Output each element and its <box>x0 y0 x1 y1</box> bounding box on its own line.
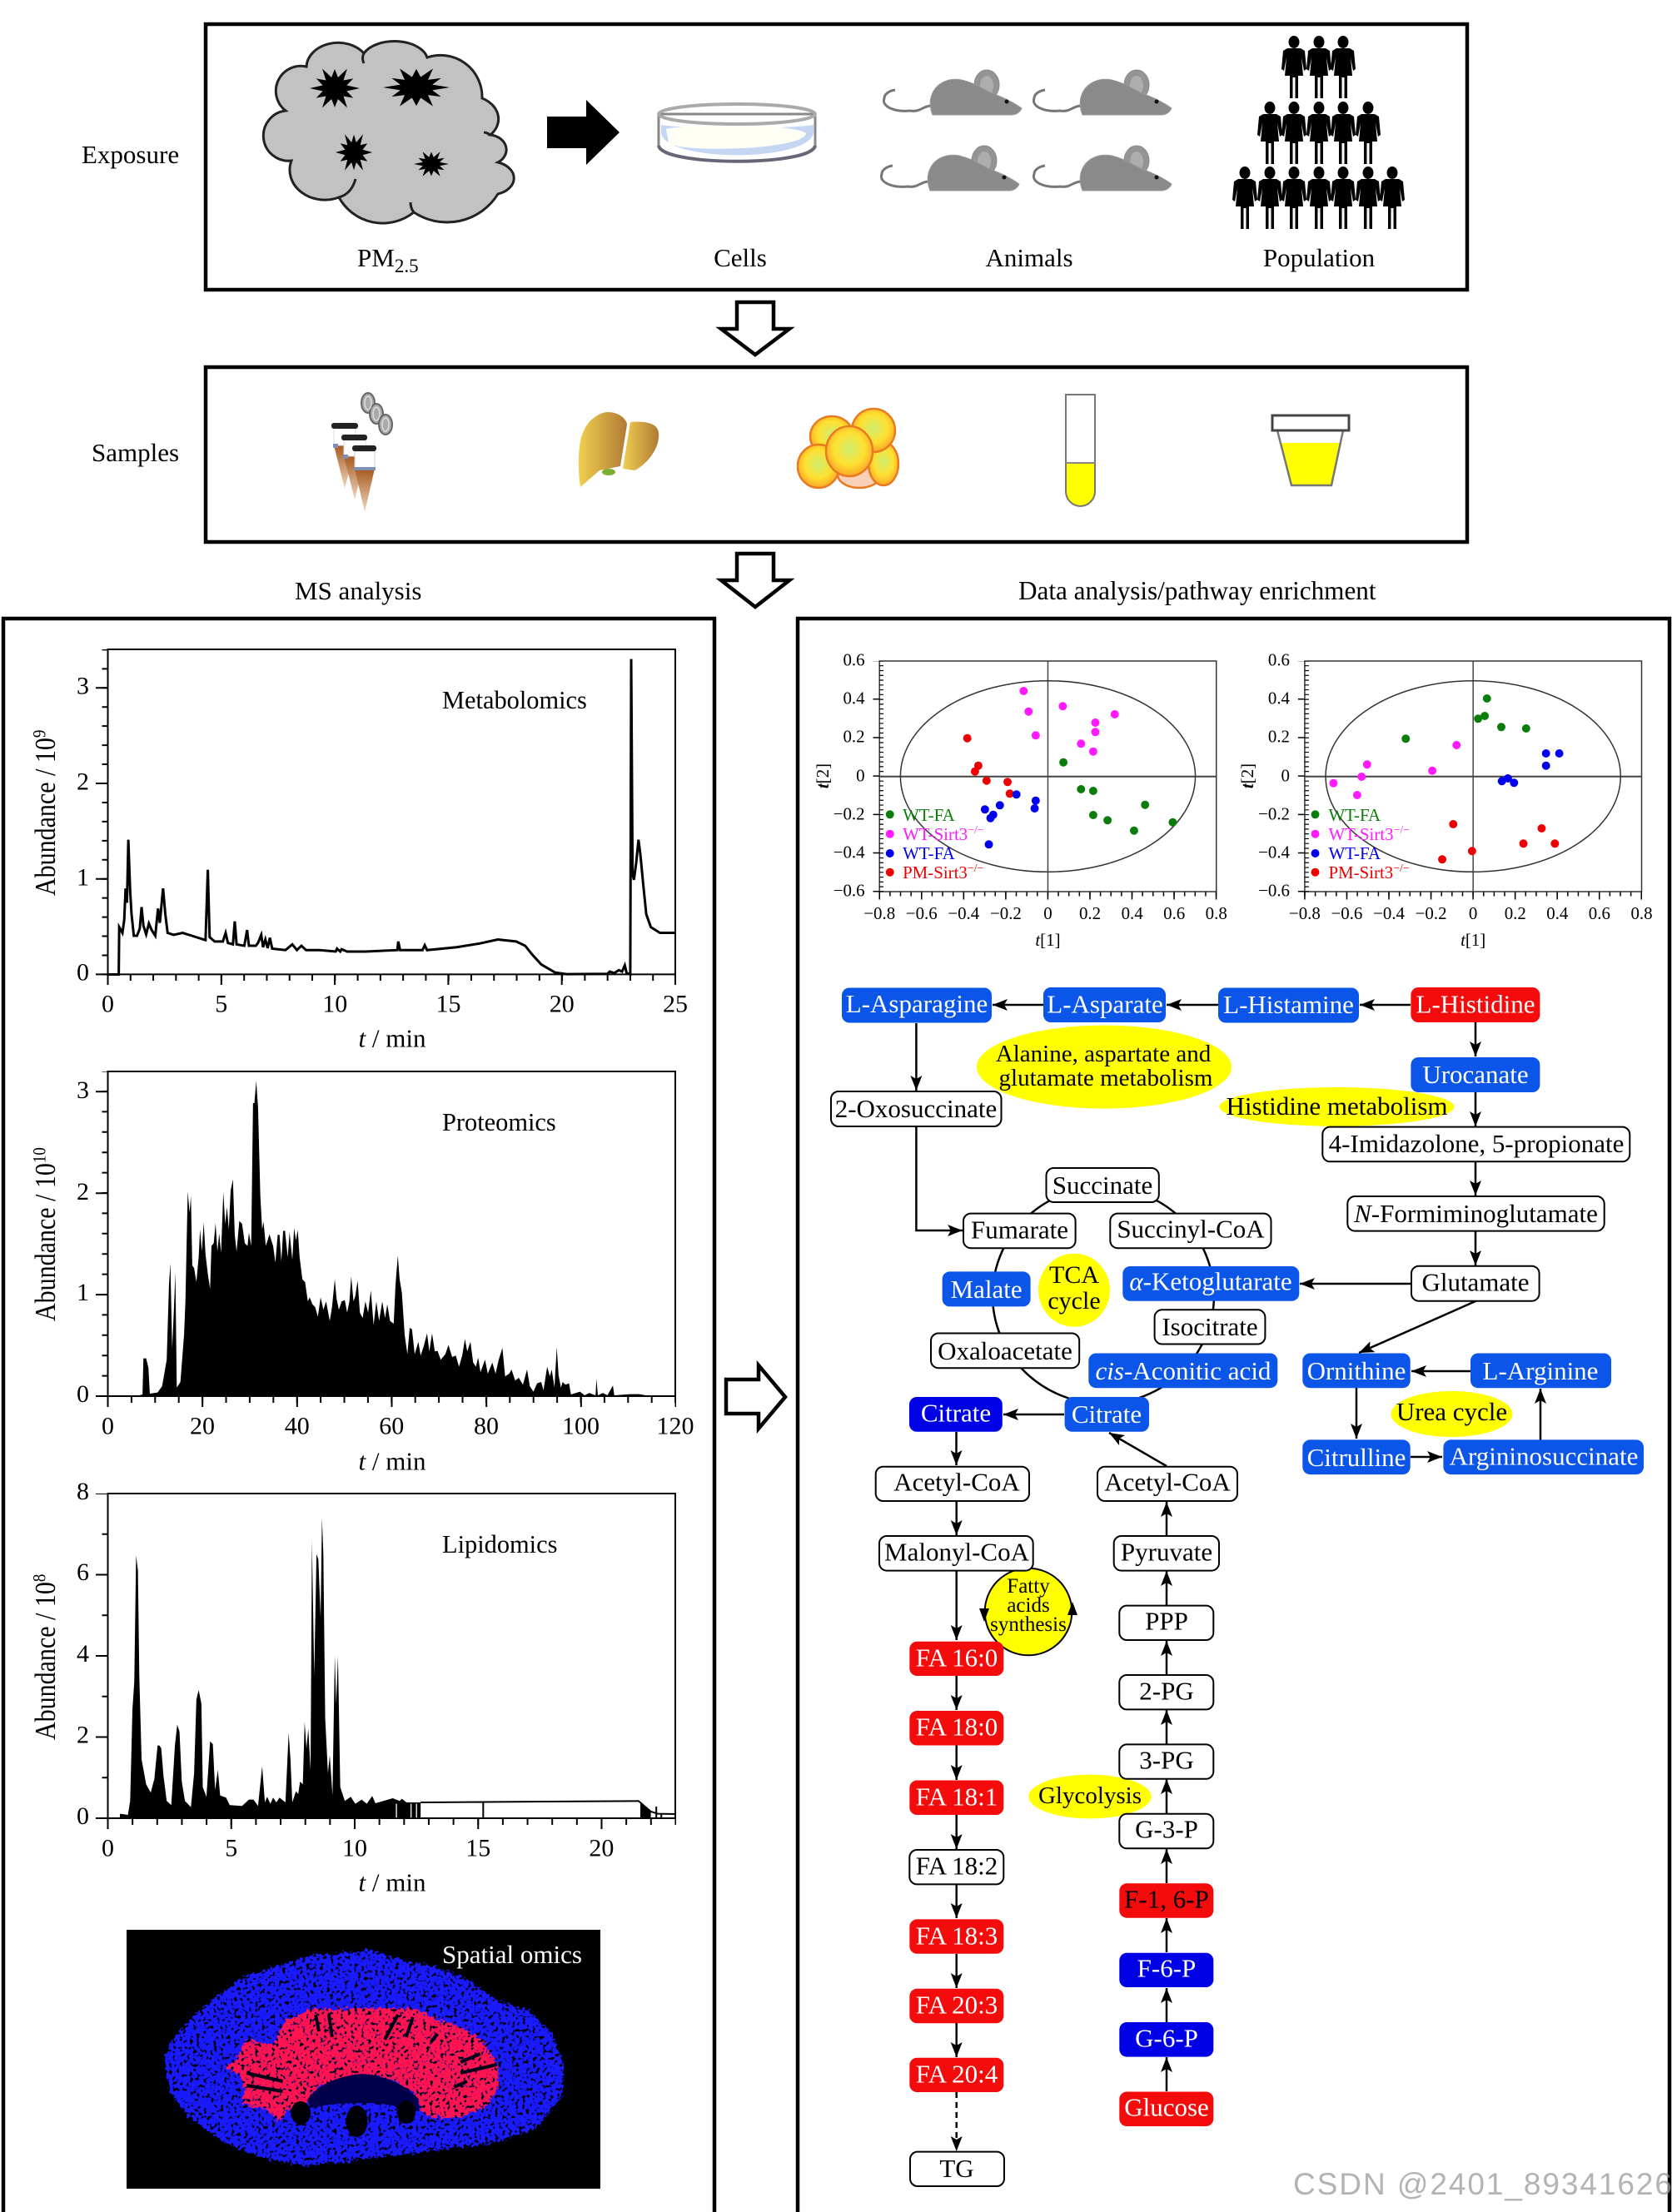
node: Acetyl-CoA left <box>876 1467 1029 1501</box>
label: Population: Population <box>1263 243 1376 272</box>
chart: PCA score plot right: 0.8 <box>1630 903 1653 923</box>
chart: proteomics: 20 <box>190 1412 215 1440</box>
panel: data analysis and pathway enrichment <box>798 619 1670 2212</box>
legend: right PCA: WT-Sirt3 <box>1328 824 1394 844</box>
node: 3-PG <box>1119 1744 1213 1779</box>
label: histidine metabolism: Histidine metabolism <box>1226 1091 1448 1121</box>
label: alanine, aspartate and glutamate metabolism: Alanine, aspartate and <box>996 1041 1212 1067</box>
chart: lipidomics: 0 <box>102 1835 114 1862</box>
chart: PCA score plot right: −0.2 <box>1416 903 1447 923</box>
label: Cells: Cells <box>714 243 767 272</box>
chart: PCA score plot left <box>813 649 1227 950</box>
chart: metabolomics: 2 <box>77 768 89 796</box>
arrows: glycolysis chain <box>1166 1571 1167 2091</box>
label: Proteomics: Proteomics <box>442 1108 556 1136</box>
legend: right PCA: WT-FA <box>1328 805 1381 825</box>
pathway bubble: histidine metabolism <box>1219 1087 1454 1126</box>
legend: left PCA <box>886 805 984 882</box>
chart: PCA score plot right <box>1237 649 1653 950</box>
axis title: abundance: Abundance / 10 <box>29 738 61 896</box>
axis title: abundance: Abundance / 10 <box>29 1582 61 1740</box>
axis title: time: t / min <box>359 1868 426 1896</box>
heading: MS analysis: MS analysis <box>295 576 421 605</box>
chart: proteomics: 0 <box>77 1380 89 1408</box>
node: 2-PG: 2-PG <box>1139 1677 1194 1705</box>
chart: PCA score plot left: 0.4 <box>843 688 865 708</box>
axis title: t[2]: t[2] <box>813 763 833 788</box>
legend: right PCA: PM-Sirt3 <box>1328 862 1393 882</box>
node: L-Asparagine: L-Asparagine <box>846 989 988 1018</box>
node: 3-PG: 3-PG <box>1139 1745 1194 1775</box>
axis title: t[2]: t[2] <box>1237 763 1257 788</box>
arrows: histidine and amino acid routes <box>916 1005 1475 1353</box>
node: cis-Aconitic acid: cis-Aconitic acid <box>1096 1356 1271 1385</box>
axis title: time: t / min <box>359 1024 426 1052</box>
chart: PCA score plot right: 0.2 <box>1505 903 1526 923</box>
chart: PCA score plot left: 0.2 <box>843 726 865 747</box>
icon: PM2.5 cloud <box>263 42 514 223</box>
pathway map <box>831 987 1644 2186</box>
chart: lipidomics: 6 <box>77 1558 89 1586</box>
chart: PCA score plot right: −0.4 <box>1373 903 1406 923</box>
node: PPP <box>1119 1606 1213 1640</box>
arrows: fatty acid chain <box>955 1571 958 2151</box>
chart: PCA score plot right: −0.8 <box>1289 903 1321 923</box>
chart: lipidomics: 4 <box>77 1640 89 1668</box>
label: Metabolomics: Metabolomics <box>442 686 587 714</box>
node: 2-Oxosuccinate: 2-Oxosuccinate <box>835 1094 997 1123</box>
arrow: MS analysis to data analysis <box>726 1365 785 1429</box>
arrows: fatty acid synthesis bubble <box>979 1602 1077 1622</box>
node: L-Histamine: L-Histamine <box>1223 990 1354 1019</box>
axis title: abundance: 10 <box>30 1147 50 1163</box>
node: Malate: Malate <box>951 1275 1023 1304</box>
legend: right PCA: −/− <box>1393 862 1410 875</box>
heading: Data analysis/pathway enrichment: Data analysis/pathway enrichment <box>1018 576 1376 605</box>
node: F-6-P <box>1119 1953 1213 1987</box>
pathway bubble: TCA cycle <box>1038 1254 1110 1327</box>
chart: lipidomics: 20 <box>589 1835 614 1862</box>
node: G-6-P <box>1119 2022 1213 2057</box>
node: FA 18:2: FA 18:2 <box>916 1852 998 1880</box>
chart: proteomics: 120 <box>656 1412 694 1440</box>
node: Succinyl-CoA: Succinyl-CoA <box>1117 1214 1265 1244</box>
label: fatty acids synthesis: acids <box>1007 1594 1050 1617</box>
chart: PCA score plot right: 0.2 <box>1268 726 1290 747</box>
panel: exposure <box>82 24 1467 290</box>
chart: proteomics: 80 <box>474 1412 499 1440</box>
icon: urine cup <box>1272 415 1349 485</box>
icon: petri dish <box>659 104 815 162</box>
label: urea cycle: Urea cycle <box>1396 1397 1507 1426</box>
chart: PCA score plot right: 0 <box>1469 903 1477 923</box>
node: Glutamate: Glutamate <box>1421 1267 1530 1297</box>
axis title: abundance: 9 <box>30 730 50 738</box>
icon: liver <box>579 412 659 487</box>
node: L-Histidine: L-Histidine <box>1416 989 1535 1019</box>
chart: PCA score plot right: −0.6 <box>1258 880 1290 901</box>
label: Animals: Animals <box>985 243 1073 272</box>
chart: PCA score plot left: 0.6 <box>843 649 865 670</box>
chart: PCA score plot right: −0.4 <box>1258 842 1291 862</box>
chart: PCA score plot left: −0.8 <box>863 903 895 923</box>
chart: lipidomics: 5 <box>225 1835 237 1862</box>
axis title: abundance: 8 <box>30 1574 50 1582</box>
legend: left PCA: −/− <box>968 862 984 875</box>
node: Pyruvate: Pyruvate <box>1121 1537 1212 1567</box>
chart: proteomics: 40 <box>285 1412 310 1440</box>
chart: lipidomics <box>29 1478 676 1896</box>
arrows: urea cycle <box>1356 1371 1540 1457</box>
node: 2-PG <box>1119 1675 1213 1709</box>
label: fatty acids synthesis: synthesis <box>990 1613 1067 1636</box>
node: Citrate dark: Citrate <box>921 1399 991 1427</box>
node: Citrate dark <box>909 1397 1003 1432</box>
icon: cell cluster <box>798 409 898 488</box>
label: glycolysis: Glycolysis <box>1038 1782 1142 1809</box>
legend: left PCA: PM-Sirt3 <box>903 862 968 882</box>
legend: left PCA: WT-FA <box>903 805 955 825</box>
node: FA 20:3: FA 20:3 <box>916 1990 998 2020</box>
node: L-Asparate: L-Asparate <box>1047 989 1163 1019</box>
chart: lipidomics: 0 <box>77 1802 89 1830</box>
node: Isocitrate: Isocitrate <box>1162 1312 1258 1341</box>
heading: Samples: Samples <box>92 438 179 467</box>
chart: proteomics <box>29 1071 694 1475</box>
chart: PCA score plot left: 0 <box>856 765 865 786</box>
node: G-6-P: G-6-P <box>1135 2023 1198 2053</box>
legend: right PCA: −/− <box>1394 824 1410 837</box>
watermark: CSDN @2401_89341626 <box>1293 2167 1672 2201</box>
node: G-3-P <box>1119 1814 1213 1848</box>
legend: left PCA: −/− <box>968 824 984 837</box>
node: Succinate: Succinate <box>1052 1171 1152 1200</box>
chart: proteomics: 60 <box>379 1412 404 1440</box>
arrow: exposure to samples <box>721 302 789 355</box>
chart: metabolomics <box>29 649 688 1052</box>
node: FA 18:3: FA 18:3 <box>916 1921 998 1950</box>
chart: PCA score plot left: −0.6 <box>906 903 938 923</box>
label: Spatial omics: Spatial omics <box>442 1940 582 1969</box>
chart: lipidomics: 15 <box>465 1835 490 1862</box>
chart: PCA score plot right: 0.6 <box>1268 649 1290 670</box>
chart: PCA score plot right: 0.6 <box>1589 903 1610 923</box>
chart: lipidomics: 2 <box>77 1722 89 1748</box>
node: Acetyl-CoA right: Acetyl-CoA <box>1104 1467 1231 1497</box>
chart: PCA score plot left: 0 <box>1043 903 1052 923</box>
chart: PCA score plot left: −0.4 <box>948 903 980 923</box>
icon: population <box>1232 36 1405 229</box>
pathway bubble: fatty acids synthesis <box>985 1568 1072 1655</box>
axis title: time: t / min <box>359 1447 426 1475</box>
node: TG <box>910 2152 1004 2186</box>
node: L-Arginine: L-Arginine <box>1483 1356 1598 1385</box>
chart: metabolomics: 1 <box>77 864 89 891</box>
chart: metabolomics: 15 <box>436 991 461 1017</box>
node: FA 16:0: FA 16:0 <box>916 1643 998 1672</box>
node: PPP: PPP <box>1145 1607 1188 1635</box>
node: Fumarate: Fumarate <box>971 1215 1068 1244</box>
node: TG: TG <box>939 2154 974 2183</box>
label: TCA cycle: cycle <box>1047 1287 1101 1315</box>
chart: metabolomics: 20 <box>550 991 575 1017</box>
icon: sample tubes <box>331 393 392 512</box>
chart: PCA score plot right: −0.6 <box>1331 903 1362 923</box>
node: N-Formiminoglutamate: N-Formiminoglutamate <box>1353 1199 1598 1228</box>
arrow: samples to analysis <box>721 554 789 607</box>
node: Ornithine: Ornithine <box>1307 1356 1406 1385</box>
chart: metabolomics: 0 <box>102 991 114 1017</box>
node: G-3-P: G-3-P <box>1135 1815 1198 1843</box>
node: FA 18:1: FA 18:1 <box>916 1782 998 1812</box>
chart: metabolomics: 5 <box>215 991 227 1017</box>
node: 4-Imidazolone, 5-propionate: 4-Imidazolone, 5-propionate <box>1329 1129 1624 1158</box>
node: Oxaloacetate: Oxaloacetate <box>938 1336 1072 1365</box>
node: Citrate <box>1065 1397 1149 1432</box>
arrows: citrate and acetyl-CoA <box>956 1414 1167 1536</box>
chart: PCA score plot left: −0.6 <box>834 880 865 901</box>
chart: metabolomics: 25 <box>663 991 688 1017</box>
chart: PCA score plot left: 0.6 <box>1163 903 1185 923</box>
legend: right PCA <box>1311 805 1410 882</box>
axis title: abundance: Abundance / 10 <box>29 1163 61 1321</box>
chart: PCA score plot right: 0 <box>1281 765 1290 786</box>
chart: PCA score plot left: −0.4 <box>834 842 865 862</box>
node: F-1, 6-P: F-1, 6-P <box>1124 1885 1209 1913</box>
label: fatty acids synthesis: Fatty <box>1007 1575 1050 1598</box>
node: Urocanate <box>1411 1057 1540 1092</box>
chart: PCA score plot right: 0.4 <box>1546 903 1569 923</box>
icon: mice <box>881 70 1172 191</box>
node: Citrate: Citrate <box>1072 1399 1142 1429</box>
node: F-6-P: F-6-P <box>1137 1953 1196 1983</box>
node: FA 20:4: FA 20:4 <box>916 2060 998 2088</box>
chart: PCA score plot left: −0.2 <box>834 803 865 824</box>
chart: PCA score plot left: 0.8 <box>1206 903 1227 923</box>
label: alanine, aspartate and glutamate metabolism: glutamate metabolism <box>999 1065 1213 1091</box>
legend: right PCA: WT-FA <box>1328 843 1381 863</box>
label: TCA cycle: TCA <box>1049 1261 1099 1289</box>
node: alpha-Ketoglutarate: α-Ketoglutarate <box>1129 1267 1292 1295</box>
chart: PCA score plot right: −0.2 <box>1258 803 1290 824</box>
node: Acetyl-CoA left: Acetyl-CoA <box>893 1467 1020 1497</box>
pathway bubble: urea cycle <box>1391 1391 1512 1437</box>
label: PM2.5: 2.5 <box>395 256 419 276</box>
legend: left PCA: WT-FA <box>903 843 955 863</box>
TCA cycle ring <box>993 1187 1214 1404</box>
panel: samples <box>92 367 1467 542</box>
chart: PCA score plot left: 0.4 <box>1122 903 1143 923</box>
chart: metabolomics: 3 <box>77 673 89 699</box>
node: Malate <box>943 1271 1031 1306</box>
chart: PCA score plot left: 0.2 <box>1079 903 1101 923</box>
chart: proteomics: 1 <box>77 1279 89 1306</box>
axis title: t[1]: t[1] <box>1035 930 1061 950</box>
arrow: PM2.5 to cells <box>547 100 620 165</box>
node: Argininosuccinate: Argininosuccinate <box>1450 1442 1638 1470</box>
chart: PCA score plot right: 0.4 <box>1268 688 1291 708</box>
node: Urocanate: Urocanate <box>1422 1060 1529 1089</box>
chart: proteomics: 3 <box>77 1076 89 1104</box>
heading: Exposure: Exposure <box>82 140 179 169</box>
node: Malonyl-CoA: Malonyl-CoA <box>884 1537 1030 1567</box>
node: Glucose: Glucose <box>1124 2093 1209 2121</box>
legend: left PCA: WT-Sirt3 <box>903 824 968 844</box>
node: FA 18:0: FA 18:0 <box>916 1712 998 1742</box>
label: PM2.5: PM <box>357 243 395 272</box>
node: L-Arginine <box>1470 1354 1611 1388</box>
image: spatial omics tissue section <box>127 1930 600 2189</box>
pathway bubble: glycolysis <box>1028 1775 1152 1818</box>
chart: metabolomics: 0 <box>77 959 89 986</box>
chart: lipidomics: 10 <box>342 1835 367 1862</box>
pathway bubble: alanine, aspartate and glutamate metabolism <box>977 1026 1232 1109</box>
chart: proteomics: 2 <box>77 1178 89 1205</box>
chart: proteomics: 0 <box>102 1412 114 1440</box>
panel: MS analysis <box>3 619 714 2212</box>
chart: metabolomics: 10 <box>322 991 347 1017</box>
chart: proteomics: 100 <box>562 1412 600 1440</box>
node: Citrulline: Citrulline <box>1307 1443 1406 1472</box>
label: Lipidomics: Lipidomics <box>442 1530 557 1558</box>
chart: PCA score plot left: −0.2 <box>990 903 1022 923</box>
icon: test tube <box>1066 395 1095 506</box>
axis title: t[1]: t[1] <box>1461 930 1485 950</box>
chart: lipidomics: 8 <box>77 1478 89 1505</box>
